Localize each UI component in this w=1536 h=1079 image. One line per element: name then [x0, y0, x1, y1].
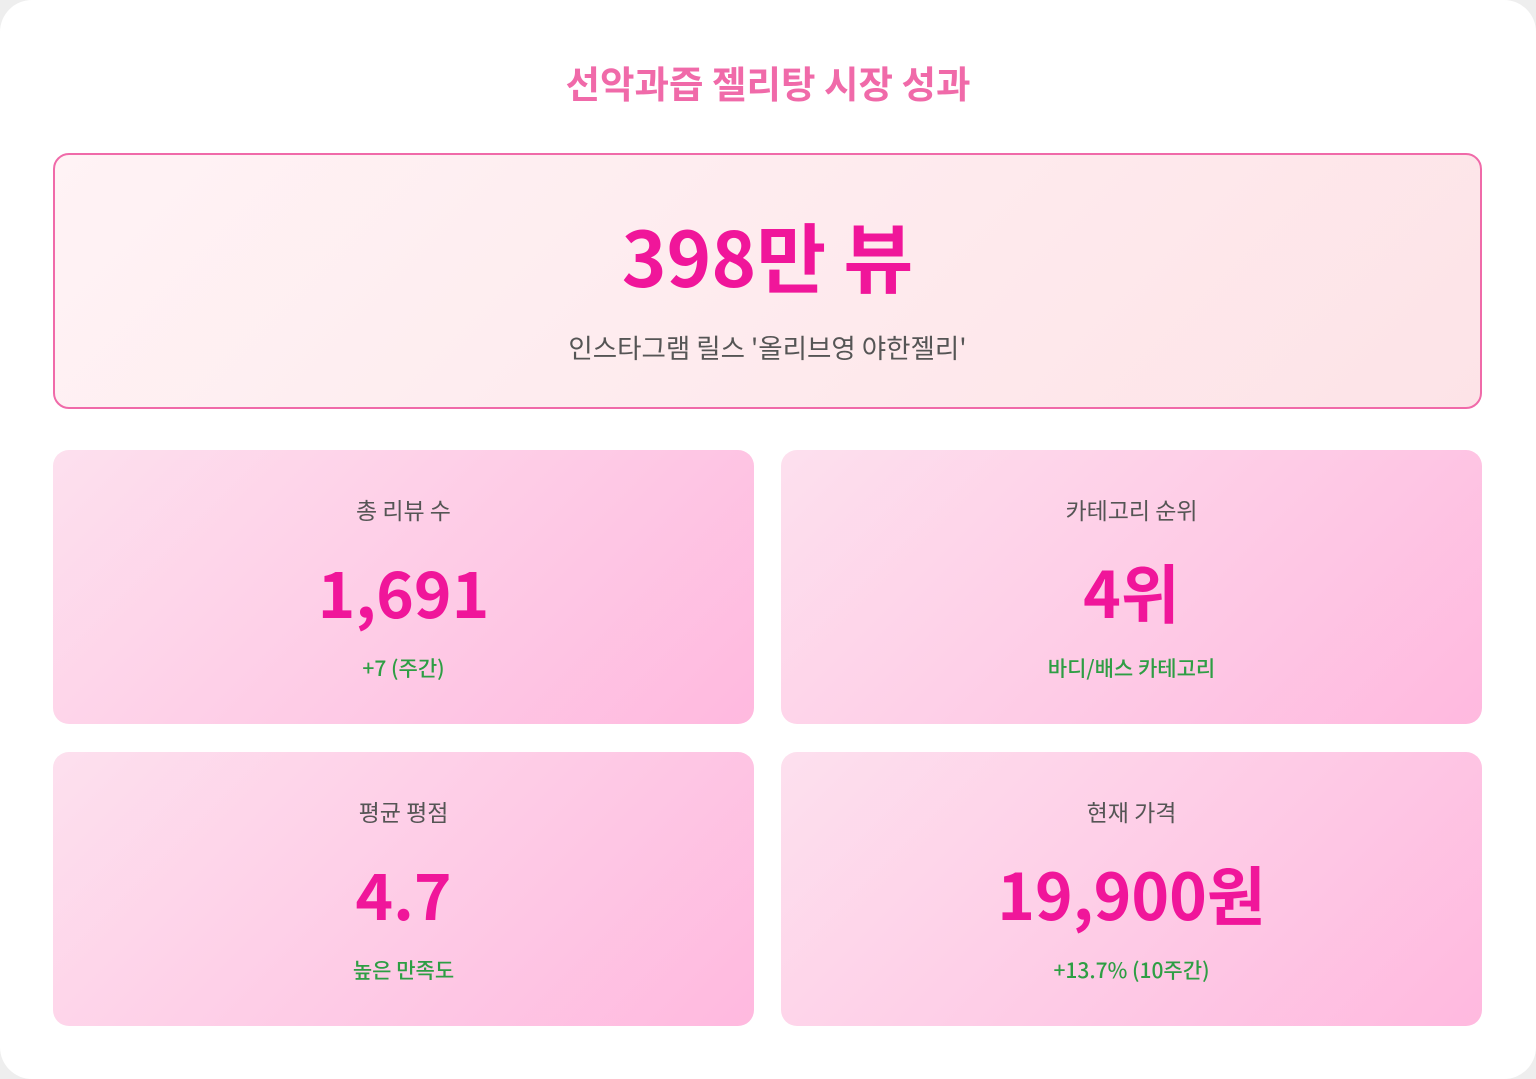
- change: +13.7% (10주간): [1053, 955, 1210, 985]
- title: 선악과즙 젤리탕 시장 성과: [565, 54, 971, 109]
- value: 4위: [1083, 545, 1180, 637]
- panel: total reviews: [53, 450, 754, 724]
- value: 19,900원: [997, 847, 1266, 939]
- panel: category rank: [781, 450, 1482, 724]
- label: 현재 가격: [1087, 794, 1176, 828]
- hero caption: 인스타그램 릴스 '올리브영 야한젤리': [568, 327, 967, 366]
- hero number: 398만 뷰: [622, 199, 913, 309]
- label: 평균 평점: [359, 794, 448, 828]
- note: 바디/배스 카테고리: [1048, 653, 1215, 683]
- panel: hero views: [53, 153, 1482, 409]
- value: 1,691: [318, 545, 489, 637]
- panel: current price: [781, 752, 1482, 1026]
- label: 총 리뷰 수: [356, 492, 451, 526]
- label: 카테고리 순위: [1065, 492, 1198, 526]
- note: 높은 만족도: [353, 955, 454, 985]
- value: 4.7: [355, 847, 452, 939]
- panel: average rating: [53, 752, 754, 1026]
- change: +7 (주간): [362, 653, 445, 683]
